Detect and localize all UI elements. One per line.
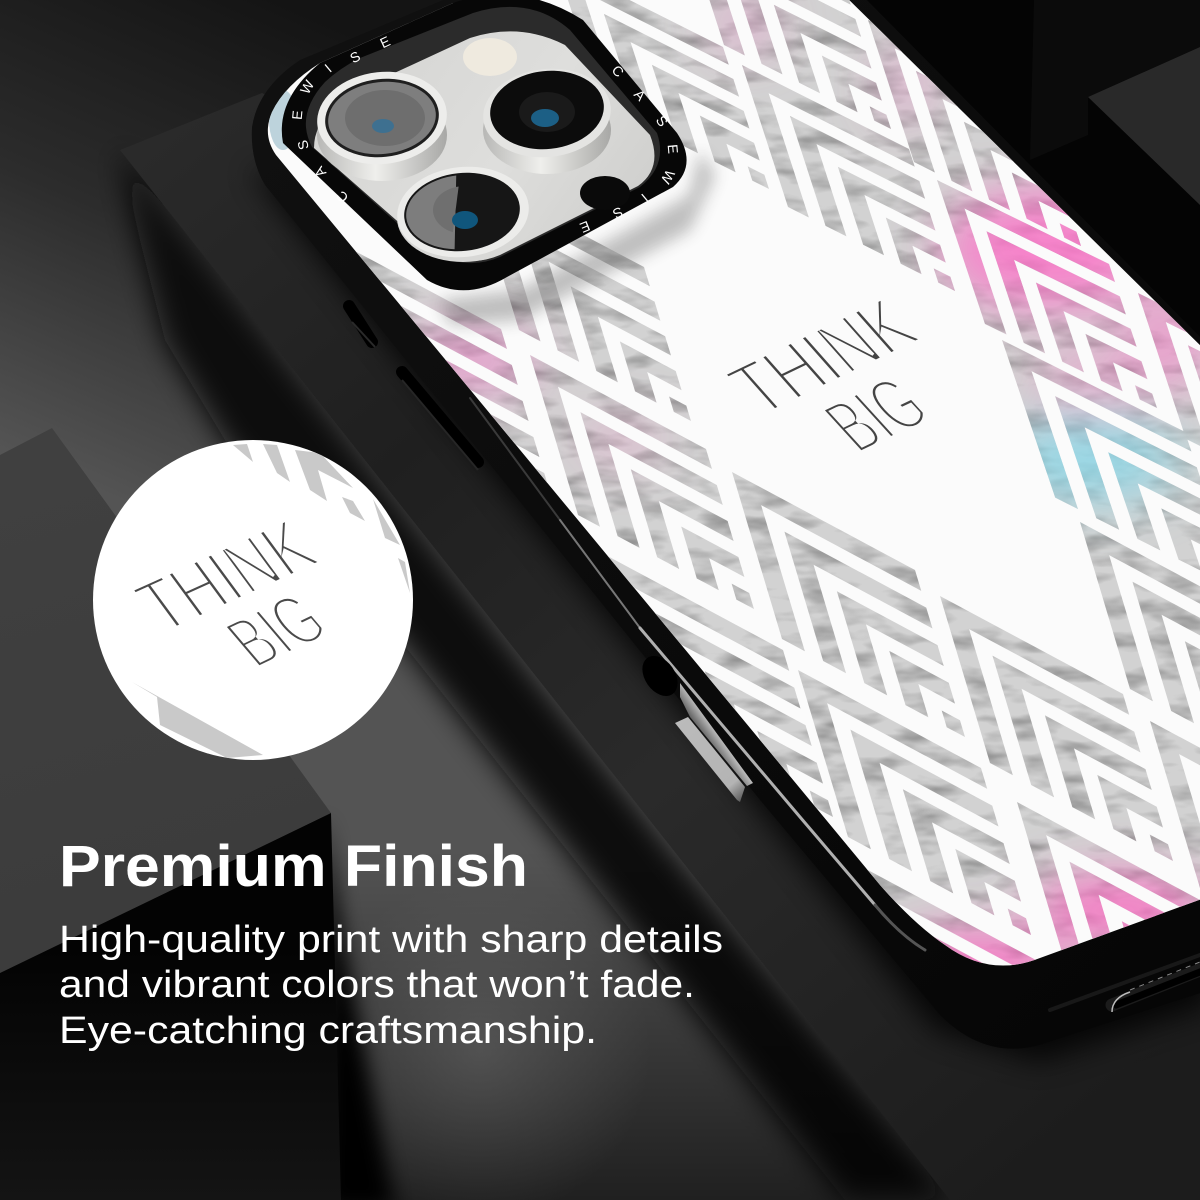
phone [252, 0, 1200, 1048]
lower-left block shadow side [0, 813, 341, 1200]
lower fade on wall [0, 850, 1000, 1200]
lens: bottom [397, 167, 529, 262]
printed screen surface [268, 0, 1200, 966]
light spot on wall [310, 880, 650, 1200]
camera well dark wall [306, 7, 660, 263]
callout THINK BIG: BIG [210, 579, 343, 682]
CASEWISE lettering right: A [631, 86, 649, 104]
circular zoom callout [93, 440, 413, 760]
lens: top-left [313, 65, 451, 181]
camera glass plate [314, 31, 654, 261]
CASEWISE lettering left [289, 33, 393, 206]
body copy: High-quality print with sharp details [59, 919, 723, 961]
CASEWISE lettering left: E [377, 33, 393, 51]
CASEWISE lettering right: E [578, 218, 592, 236]
lower-left block top face [0, 428, 331, 973]
callout marble fragments [132, 444, 410, 758]
lens: top-right [479, 63, 615, 174]
white base [240, 0, 1200, 990]
pedestal dark side strip [120, 150, 950, 1200]
CASEWISE lettering right: S [610, 204, 626, 222]
body copy: Eye-catching craftsmanship. [59, 1010, 597, 1052]
power button chrome [675, 683, 753, 802]
CASEWISE lettering left: S [294, 138, 312, 152]
phone case frame [252, 0, 1200, 1049]
THINK BIG print: BIG [807, 362, 946, 468]
THINK BIG print [727, 300, 923, 450]
pale blue sliver behind island [269, 91, 292, 150]
CASEWISE lettering right: W [657, 167, 678, 187]
CASEWISE lettering right [578, 62, 681, 236]
CASEWISE lettering right: C [609, 62, 627, 80]
heading: Premium Finish [59, 834, 528, 899]
CASEWISE lettering right: E [665, 144, 681, 154]
island black rim [282, 0, 687, 290]
phone contact shadow [250, 170, 1200, 1062]
island shadow [440, 150, 715, 325]
body copy: and vibrant colors that won’t fade. [59, 964, 695, 1006]
camera island [282, 0, 687, 290]
marble chevron pattern [356, 0, 1200, 965]
CASEWISE lettering left: E [289, 110, 305, 120]
CASEWISE lettering right: S [653, 113, 671, 129]
CASEWISE lettering left: A [310, 163, 329, 180]
charging port [1112, 962, 1200, 1012]
block: upper-right dark backdrop [840, 0, 1200, 350]
CASEWISE lettering left: W [297, 77, 318, 97]
flash [463, 38, 517, 76]
THINK BIG print: THINK [712, 284, 935, 431]
CASEWISE lettering right: I [638, 191, 652, 205]
side buttons [349, 306, 478, 470]
microphone hole [580, 176, 630, 210]
callout disc [93, 440, 413, 760]
pink and blue tint [400, 0, 1200, 995]
CASEWISE lettering left: C [333, 188, 351, 206]
CASEWISE lettering left: I [321, 61, 335, 75]
body copy [59, 919, 723, 1052]
lower block cast shadow [325, 813, 395, 1200]
power button recess [635, 649, 685, 703]
CASEWISE lettering left: S [347, 48, 363, 66]
frame gloss highlights [470, 398, 1200, 1010]
callout THINK BIG: THINK [120, 504, 332, 648]
